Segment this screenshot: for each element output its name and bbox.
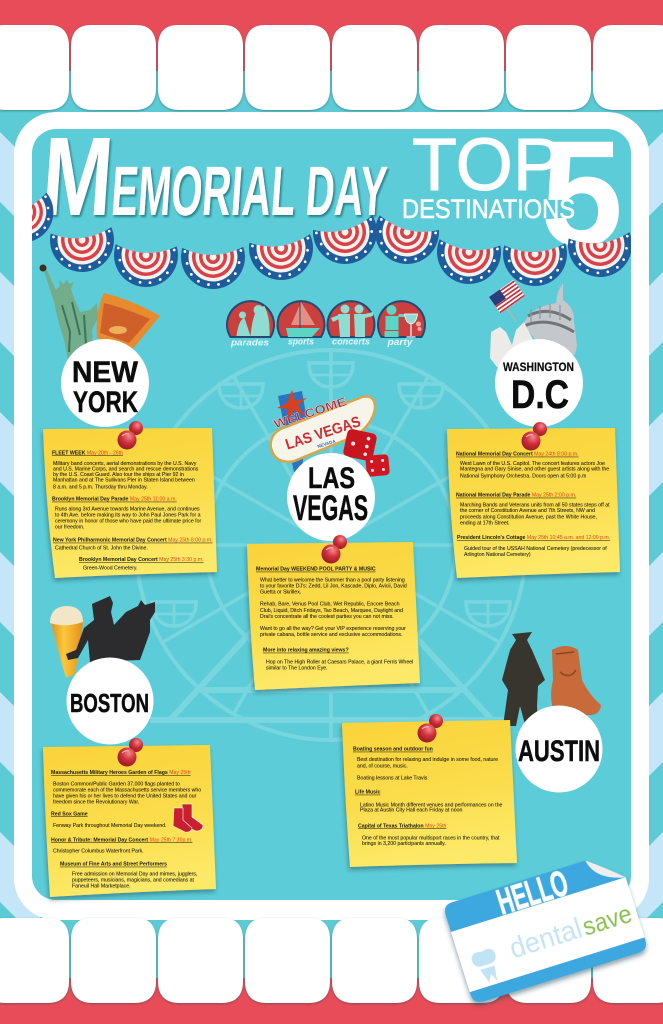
- pin: Las Vegas: [322, 535, 347, 564]
- note: Washington D.C: West Lawn of the U.S. Capitol. The concert features actors Joe: [460, 461, 605, 467]
- note: Washington D.C: National Memorial Day Concert May 24th 8:00 p.m.: [456, 452, 579, 458]
- note: Austin: Life Music: [355, 790, 380, 796]
- note: Boston: Honor & Tribute: Memorial Day Concert May 25th 7:30p.m.: [51, 837, 193, 843]
- note: New York: Runs along 3rd Avenue towards Marine Avenue, and continues: [55, 507, 200, 513]
- note: Washington D.C: [447, 428, 620, 578]
- ferris wheel watermark: [136, 350, 526, 740]
- note: New York: [43, 428, 217, 578]
- city badge: Austin: [516, 706, 602, 792]
- landmark: US Capitol: [490, 283, 577, 367]
- pin: Washington D.C: [522, 422, 547, 450]
- red gums top: [0, 0, 663, 71]
- hello text: HELLO: [492, 862, 573, 923]
- city badge: Washington D.C: [495, 339, 583, 427]
- city badge: New York: YORK: [73, 386, 138, 419]
- note: Boston: freedom since the Revolutionary War.: [53, 799, 139, 805]
- title: Top 5 Destinations: [402, 109, 623, 277]
- note: New York: Brooklyn Memorial Day Parade May 25th 11:00 a.m.: [52, 497, 177, 503]
- icon: Red Sox socks: [173, 804, 203, 832]
- icon: cowboy boot: [551, 646, 601, 716]
- note: Boston: Red Sox Game: [51, 811, 88, 817]
- icon: red dice: [342, 428, 390, 477]
- dentalsave logo: dental: [506, 913, 586, 965]
- title: Memorial Day: [38, 113, 389, 239]
- note: Boston: commemorate each of the Massachusetts service members who: [53, 787, 201, 793]
- bottom teeth: [0, 918, 663, 1003]
- landmark: Paul Revere horse statue: [66, 596, 155, 662]
- note: New York: 8 a.m. and 5 p.m. Thursday thru Monday.: [53, 484, 148, 490]
- note: New York: and U.S. Marine Corps, and search and rescue demonstrations: [53, 466, 199, 472]
- note: Las Vegas: similar to The London Eye.: [266, 665, 328, 671]
- city badge: Boston: [66, 658, 154, 744]
- note: New York: Cathedral Church of St. John the Divine.: [55, 545, 148, 551]
- city badge: Las Vegas: VEGAS: [293, 489, 368, 528]
- note: Washington D.C: the corner of Constitution Avenue and 7th Streets, NW and: [460, 508, 595, 514]
- icon labels: parades: [230, 338, 269, 348]
- note: New York: to 4th Ave. before making its way to John Paul Jones Park for a: [55, 513, 201, 519]
- icon: Las Vegas sign: [262, 386, 384, 472]
- icon: Las Vegas sign: LAS VEGAS: [283, 413, 363, 453]
- note: New York: Brooklyn Memorial Day Concert May 25th 3:30 p.m.: [79, 557, 204, 563]
- note: New York: Military band concerts, aerial demonstrations by the U.S. Navy: [53, 461, 197, 467]
- activity icons row: [227, 301, 425, 348]
- note: Austin: One of the most popular multisport races in the country, that: [362, 835, 500, 841]
- city badge: Boston: BOSTON: [70, 688, 149, 718]
- note: Austin: Boating season and outdoor fun: [353, 747, 433, 753]
- note: Washington D.C: National Symphony Orchestra. Doors open at 5:00 p.m: [460, 473, 586, 479]
- city badge: New York: NEW: [72, 356, 139, 389]
- note: Washington D.C: Marching Bands and Veterans units from all 50 states steps off at: [460, 502, 610, 508]
- icon: American flag: [489, 280, 534, 326]
- note: Las Vegas: Rehab, Bare, Venus Pool Club, Wet Republic, Encore Beach: [260, 602, 400, 608]
- note: Washington D.C: National Memorial Day Parade May 25th 2:00 p.m.: [456, 493, 576, 499]
- note: Boston: [43, 745, 216, 897]
- note: Las Vegas: private cabana, bottle service and exclusive accommodations.: [260, 632, 402, 638]
- top teeth: [0, 25, 663, 110]
- note: New York: Manhattan and at The Sullivans Pier in Staten Island between: [53, 478, 195, 484]
- note: Boston: Fenway Park throughout Memorial Day weekend.: [53, 823, 167, 829]
- dentalsave logo: save: [579, 898, 635, 942]
- city badge: New York: [61, 339, 149, 427]
- note: Las Vegas: What better to welcome the Summer than a pool party listening: [260, 578, 405, 584]
- note: Boston: Faneuil Hall Marketplace.: [72, 883, 131, 889]
- icon: sports: [278, 301, 324, 337]
- note: Boston: Free admission on Memorial Day and mimes, jugglers,: [72, 872, 197, 878]
- note: Austin: Best destination for relaxing and indulge in some food, nature: [357, 757, 498, 763]
- city badge: Austin: AUSTIN: [518, 735, 600, 768]
- note: Austin: brings in 3,200 participants annually.: [362, 841, 446, 847]
- fold corner: [585, 851, 626, 887]
- title: Memorial Day: M: [38, 113, 117, 239]
- icon: parades: [227, 301, 274, 337]
- note: Washington D.C: President Lincoln's Cottage May 25th 10:45 a.m. and 12:00 p.m.: [457, 535, 610, 541]
- icon: Las Vegas sign: NEVADA: [317, 438, 337, 449]
- note: Las Vegas: [247, 542, 420, 690]
- note: Austin: Latino Music Month different venues and performances on the: [360, 802, 502, 808]
- note: New York: our freedom.: [55, 525, 84, 531]
- note: Austin: Boating lessons at Lake Travis: [357, 775, 428, 781]
- note: Las Vegas: to your favorite DJ's: Zedd, Lil Jon, Kascade, Diplo, Avicii, David: [260, 583, 407, 589]
- teal inner panel: [32, 129, 631, 900]
- note: New York: ceremony in honor of those who have paid the ultimate price for: [55, 519, 201, 525]
- note: Boston: Massachusetts Military Heroes Garden of Flags May 25th: [51, 770, 191, 776]
- icon labels: sports: [288, 336, 314, 348]
- note: Austin: [342, 720, 517, 867]
- note: Washington D.C: ending at 17th Street.: [460, 521, 510, 527]
- note: Boston: Boston Common/Public Garden 37,000 flags planted to: [53, 782, 180, 788]
- pin: Austin: [418, 714, 443, 742]
- note: Boston: Christopher Columbus Waterfront Park.: [53, 848, 144, 854]
- note: Washington D.C: proceeds along Constitution Avenue, past the White House,: [460, 514, 597, 520]
- tooth logo icon: [470, 947, 503, 986]
- icon labels: concerts: [332, 336, 370, 348]
- title: Memorial Day: EMORIAL DAY: [109, 152, 389, 230]
- title: Top 5 Destinations: DESTINATIONS: [402, 194, 575, 224]
- note: New York: by the U.S. Coast Guard. Also tour the ships at Pier 92 in: [53, 472, 184, 478]
- note: Boston: have given his or her lives to defend the United States and our: [53, 794, 197, 800]
- icon labels: party: [386, 337, 413, 348]
- note: Washington D.C: Guided tour of the USSAH National Cemetery (predecessor of: [464, 546, 607, 552]
- note: Austin: Plaza at Austin City Hall each Friday at noon: [360, 808, 462, 814]
- red gums bottom: [0, 978, 663, 1024]
- note: New York: FLEET WEEK May 20th - 26th: [52, 450, 123, 456]
- pin: New York: [118, 421, 143, 450]
- icon labels: [230, 336, 413, 348]
- note: Las Vegas: Drai's concentrate all the coolest parties you can not miss.: [260, 614, 394, 620]
- note: Las Vegas: Club, Liquid, Ditch Fridays, Tao Beach, Marquee, Daylight and: [260, 608, 403, 614]
- note: Washington D.C: Arlington National Cemetery): [464, 552, 531, 558]
- city badge: Las Vegas: [287, 453, 375, 541]
- note: Austin: Capital of Texas Triathalon May 25th: [358, 823, 447, 829]
- note: Las Vegas: Hop on The High Roller at Caesars Palace, a giant Ferris Wheel: [266, 660, 413, 666]
- city badge: Washington D.C: WASHINGTON: [503, 362, 574, 374]
- city badge: Washington D.C: D.C: [511, 373, 569, 417]
- hello name tag: [441, 845, 648, 1004]
- landmark: Statue of Liberty: [40, 264, 98, 360]
- pin: Boston: [118, 738, 143, 766]
- title: Top 5 Destinations: 5: [541, 109, 623, 277]
- note: New York: New York Philharmonic Memorial Day Concert May 25th 8:00 p.m.: [53, 538, 213, 544]
- landmark: Austin statue: [502, 632, 545, 728]
- note: Washington D.C: Mantegna and Gary Sinise, and other guest artists along with the: [460, 467, 609, 473]
- icon: beer glass: [50, 606, 83, 678]
- main white frame: [14, 112, 649, 920]
- note: Las Vegas: Want to go all the way? Get your VIP experience reserving your: [260, 626, 406, 632]
- note: Las Vegas: Memorial Day WEEKEND POOL PARTY & MUSIC: [256, 567, 376, 573]
- icon: pizza slice: [97, 293, 160, 350]
- note: Boston: puppeteers, musicians, magicians, and comedians at: [72, 877, 195, 883]
- bunting garland: [32, 192, 631, 289]
- title: Top 5 Destinations: TOP: [412, 123, 562, 206]
- icon: concerts: [328, 301, 374, 337]
- note: Austin: and, of course, music.: [357, 763, 408, 769]
- note: Boston: Museum of Fine Arts and Street Performers: [60, 862, 167, 868]
- dentalsave logo: [506, 897, 636, 965]
- icon: party: [378, 301, 425, 337]
- note: Las Vegas: More into relaxing amazing views?: [263, 648, 349, 654]
- note: New York: Green-Wood Cemetery.: [83, 565, 138, 571]
- city badge: Las Vegas: LAS: [308, 462, 355, 495]
- my name is: my name is: [526, 901, 557, 916]
- note: Las Vegas: Guetta or Skrillex.: [260, 589, 301, 595]
- icon: Las Vegas sign: WELCOME: [272, 394, 348, 431]
